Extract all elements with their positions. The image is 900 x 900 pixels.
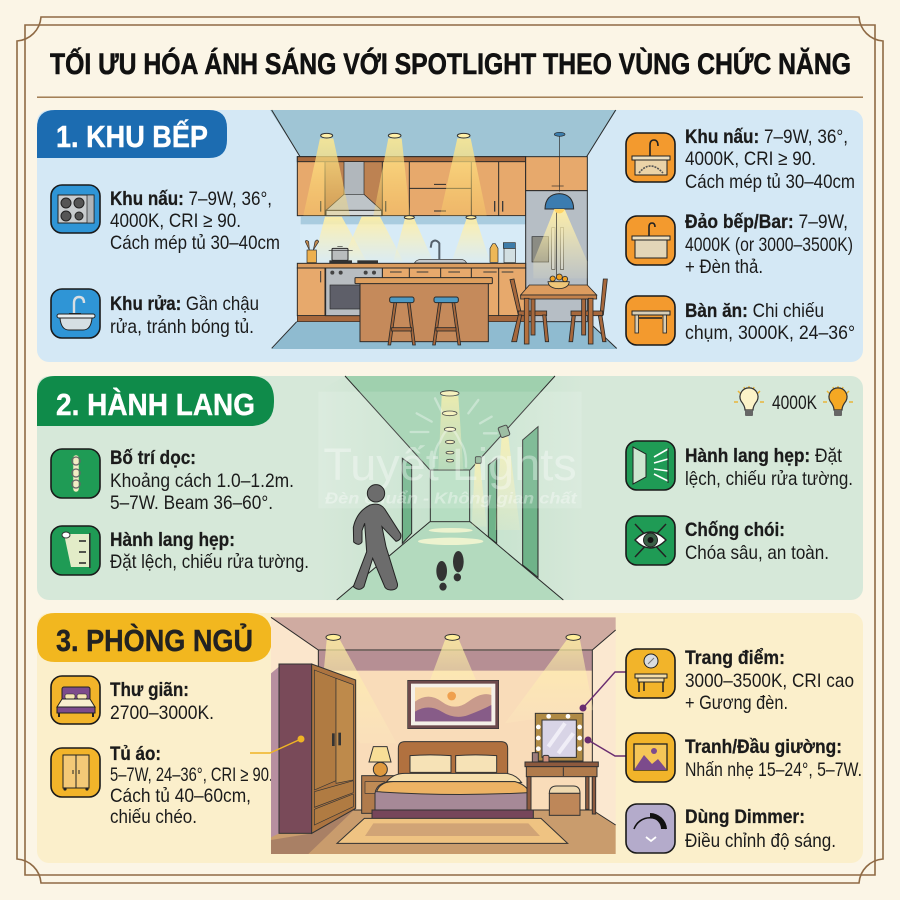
panel: hành lang: 5–7W. Beam 36–60°. xyxy=(110,492,273,514)
icon: bếp từ xyxy=(51,185,100,233)
icon: bếp nấu xyxy=(626,133,675,182)
countertop decor xyxy=(305,240,515,263)
icon: bàn trang điểm xyxy=(626,649,675,698)
text: thư giãn: Thư giãn: xyxy=(110,679,189,701)
text: đảo bếp: Đảo bếp/Bar: 7–9W, xyxy=(685,211,848,233)
heading: 3. phòng ngủ: 3. PHÒNG NGỦ xyxy=(56,622,253,658)
watermark xyxy=(318,392,582,508)
panel: hành lang: Đặt lệch, chiếu rửa tường. xyxy=(110,551,309,573)
base cabinets and oven xyxy=(297,263,526,322)
text: khu nấu phải: Khu nấu: 7–9W, 36°, xyxy=(685,126,848,148)
icon: tranh xyxy=(626,733,675,782)
heading: 2. hành lang: 2. HÀNH LANG xyxy=(56,387,255,422)
panel: hành lang: Chóa sâu, an toàn. xyxy=(685,542,829,564)
panel: khu bếp: rửa, tránh bóng tủ. xyxy=(110,316,254,338)
icon: dimmer xyxy=(626,804,675,853)
panel: phòng ngủ: Cách tủ 40–60cm, xyxy=(110,785,251,807)
illustration: bedroom xyxy=(271,617,616,854)
panel: phòng ngủ: + Gương đèn. xyxy=(685,692,788,714)
callout: tranh đầu giường xyxy=(584,736,627,756)
watermark: Đèn chuẩn - Không gian chất xyxy=(325,489,578,507)
callout: tủ áo xyxy=(250,736,304,753)
wardrobe xyxy=(271,664,356,854)
icon: bàn ăn xyxy=(626,296,675,345)
panel: phòng ngủ: 2700–3000K. xyxy=(110,702,214,724)
panel: phòng ngủ: 5–7W, 24–36°, CRI ≥ 90. xyxy=(110,764,273,786)
panel: khu bếp: 4000K, CRI ≥ 90. xyxy=(110,210,241,232)
heading: 1. khu bếp xyxy=(37,110,227,158)
heading: 3. phòng ngủ xyxy=(37,613,272,662)
text: khu rửa: Khu rửa: Gần chậu xyxy=(110,293,259,315)
corridor doors xyxy=(402,427,538,577)
illustration: corridor xyxy=(318,376,583,600)
spotlights and beams xyxy=(322,634,593,743)
text: dùng dimmer: Dùng Dimmer: xyxy=(685,806,805,828)
panel: khu bếp: Cách mép tủ 30–40cm xyxy=(110,232,280,254)
panel: khu bếp: Cách mép tủ 30–40cm xyxy=(685,171,855,193)
text: bàn ăn: Bàn ăn: Chi chiếu xyxy=(685,300,824,322)
text: hành lang hẹp trái: Hành lang hẹp: xyxy=(110,529,235,551)
panel: khu bếp: 4000K (or 3000–3500K) xyxy=(685,234,853,256)
island and stools xyxy=(355,278,492,345)
ceiling light beams xyxy=(418,391,520,545)
panel: phòng ngủ: chiếu chéo. xyxy=(110,806,197,828)
text: trang điểm: Trang điểm: xyxy=(685,647,785,669)
footprints xyxy=(436,551,464,591)
text: chống chói: Chống chói: xyxy=(685,519,785,541)
dining set xyxy=(510,274,607,344)
text: khu nấu: Khu nấu: 7–9W, 36°, xyxy=(110,188,272,210)
icon: chiếu rửa tường xyxy=(626,441,675,490)
panel: phòng ngủ: Nhấn nhẹ 15–24°, 5–7W. xyxy=(685,759,862,781)
text: hành lang hẹp phải: Hành lang hẹp: Đặt xyxy=(685,445,843,467)
panel: khu bếp: 4000K, CRI ≥ 90. xyxy=(685,148,816,170)
icon: đảo bếp xyxy=(626,216,675,265)
icon: bồn rửa xyxy=(51,289,100,338)
text: tủ áo: Tủ áo: xyxy=(110,743,161,765)
text: tranh đầu giường: Tranh/Đầu giường: xyxy=(685,736,842,758)
icon: tủ áo xyxy=(51,748,100,797)
heading: 2. hành lang xyxy=(37,376,274,426)
text: bố trí dọc: Bố trí dọc: xyxy=(110,447,196,469)
icon: giường xyxy=(51,676,100,724)
color temperature legend: 4000K xyxy=(772,392,817,414)
panel: phòng ngủ: Điều chỉnh độ sáng. xyxy=(685,830,836,852)
recessed lights and beams xyxy=(303,133,587,278)
framed picture xyxy=(408,680,499,729)
panel: khu bếp: + Đèn thả. xyxy=(685,256,763,278)
watermark: Tuyết Lights xyxy=(323,439,577,490)
icon: warm white bulb xyxy=(734,386,764,416)
icon: hành lang hẹp trái xyxy=(51,526,100,575)
panel: phòng ngủ xyxy=(37,613,863,863)
panel: hành lang xyxy=(37,376,863,600)
upper cabinets xyxy=(297,157,526,216)
panel: hành lang: Khoảng cách 1.0–1.2m. xyxy=(110,470,294,492)
icon: chống chói xyxy=(626,516,675,565)
bed xyxy=(372,742,533,831)
color temperature legend xyxy=(734,386,853,416)
refrigerator xyxy=(526,157,587,322)
bedside table and lamp xyxy=(362,747,395,813)
range hood xyxy=(326,162,382,216)
walking person xyxy=(353,485,401,590)
panel: khu bếp xyxy=(37,110,863,362)
callout: trang điểm xyxy=(580,672,627,712)
panel: hành lang: lệch, chiếu rửa tường. xyxy=(685,468,853,490)
panel: phòng ngủ: 3000–3500K, CRI cao xyxy=(685,670,854,692)
illustration: kitchen xyxy=(270,110,617,349)
heading: 1. khu bếp: 1. KHU BẾP xyxy=(56,119,208,154)
vanity with mirror xyxy=(525,713,598,815)
icon: bố trí dọc xyxy=(51,449,100,498)
panel: khu bếp: chụm, 3000K, 24–36° xyxy=(685,322,855,344)
rug xyxy=(337,818,568,843)
icon: warm amber bulb xyxy=(823,386,853,416)
pendant lamp xyxy=(545,132,574,278)
